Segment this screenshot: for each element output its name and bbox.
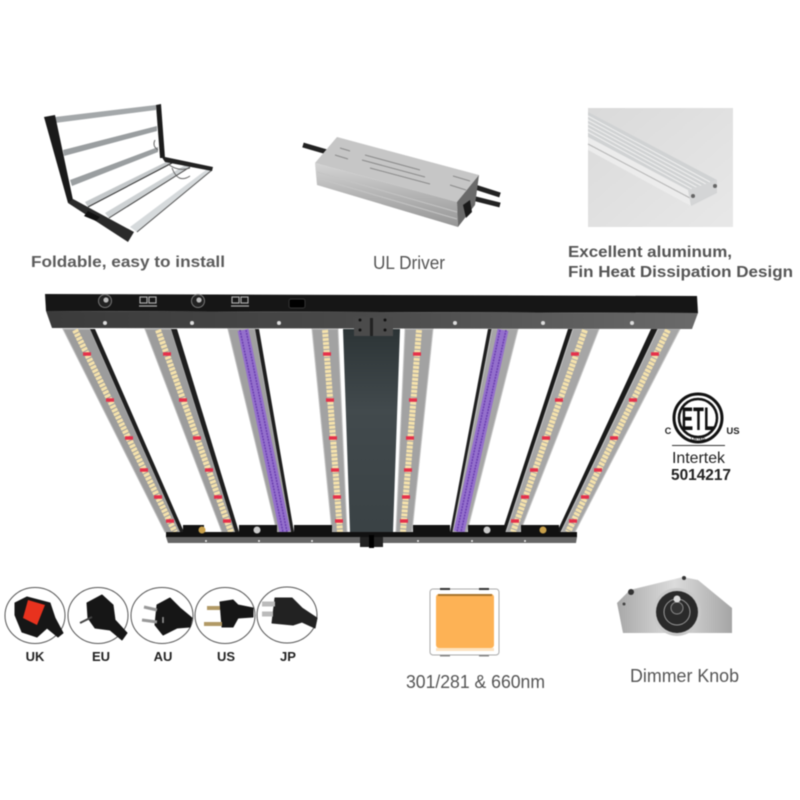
panel: aluminum heat sink: [568, 108, 793, 281]
bar 1: [63, 329, 184, 532]
EU plug: [68, 588, 128, 644]
panel: LED chip: [406, 588, 545, 692]
foldable frame illustration: [44, 104, 213, 242]
panel: foldable frame: [31, 104, 225, 271]
bottom rail: [166, 525, 577, 543]
ETL certification mark: C: [665, 426, 672, 436]
dimmer knob photo: [617, 576, 732, 636]
US plug: [195, 588, 255, 644]
plug labels: JP: [280, 649, 296, 664]
bar 7: [502, 329, 599, 532]
panel: UL driver: [303, 137, 500, 273]
panel: dimmer knob: [617, 576, 739, 686]
UK plug: [5, 588, 65, 644]
caption: dimmer knob: Dimmer Knob: [630, 665, 739, 686]
ETL certification mark: ETL: [682, 401, 714, 437]
caption: aluminum: Fin Heat Dissipation Design: [568, 264, 793, 281]
ETL certification mark: US: [726, 426, 740, 437]
top rail: [45, 294, 698, 329]
bottom clip: [360, 535, 383, 548]
connector nuts: [198, 526, 546, 534]
panel: plug types: [5, 587, 317, 664]
bar 6 purple: [450, 329, 518, 532]
plug labels: US: [217, 649, 235, 664]
bar 3 purple: [228, 329, 294, 532]
caption: LED wavelengths: 301/281 & 660nm: [406, 672, 545, 692]
ETL certification mark: Intertek: [672, 450, 726, 467]
ETL certification mark: [665, 394, 740, 484]
caption: UL driver: UL Driver: [373, 253, 445, 273]
AU plug: [131, 588, 193, 644]
center driver panel: [343, 329, 400, 532]
bar 2: [145, 329, 239, 532]
caption: foldable: Foldable, easy to install: [31, 254, 225, 271]
plug labels: UK: [26, 649, 45, 664]
ETL certification mark: LISTED: [691, 436, 705, 441]
bar 8: [557, 329, 680, 532]
panel: LED grow light fixture: [45, 294, 698, 548]
caption: aluminum: Excellent aluminum,: [568, 244, 732, 261]
heat sink photo: [588, 108, 733, 227]
plug labels: AU: [154, 649, 172, 664]
dimmer knob 1: [98, 294, 112, 308]
dimmer knob 2: [192, 294, 204, 308]
rating label 2: [231, 297, 249, 306]
bar 4: [312, 329, 347, 532]
power socket: [289, 299, 305, 308]
ETL certification mark: 5014217: [671, 467, 731, 484]
plug labels: [26, 649, 296, 664]
driver illustration: [303, 137, 500, 227]
plug labels: EU: [92, 649, 110, 664]
bar 5: [396, 329, 433, 532]
center bracket: [354, 317, 393, 336]
LED chip icon: [430, 588, 499, 656]
rating label 1: [139, 297, 157, 306]
JP plug: [257, 587, 317, 643]
